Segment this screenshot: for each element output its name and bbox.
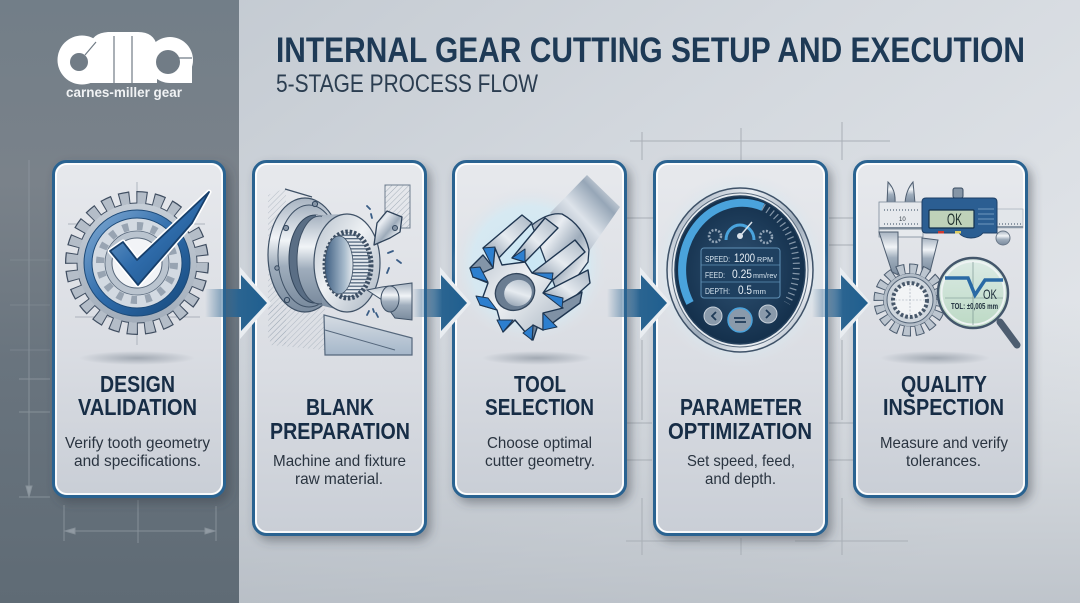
caliper	[879, 182, 1023, 275]
magnifier	[938, 258, 1017, 345]
small dial	[709, 222, 772, 243]
parameter readout: SPEED:	[705, 254, 730, 264]
panel: blank preparation	[254, 162, 426, 534]
magnifier: OK	[983, 286, 997, 302]
description: design validation: and specifications.	[74, 453, 201, 470]
arrow: stage 3 to 4	[607, 267, 671, 339]
icon: caliper and magnifier	[879, 182, 1023, 365]
parameter readout	[701, 248, 780, 298]
heading: design validation: VALIDATION	[78, 394, 197, 420]
icon: cutting tool	[374, 185, 410, 245]
cutter face	[473, 248, 563, 340]
arrow: stage 2 to 3	[412, 267, 471, 339]
left dark band	[0, 0, 239, 603]
heading: blank preparation: BLANK	[306, 394, 374, 420]
parameter readout: 0.5	[738, 283, 752, 297]
heading: quality inspection	[883, 371, 1004, 420]
icon: gear blank on lathe	[268, 185, 412, 355]
heading: tool selection	[485, 371, 594, 420]
caliper: OK	[947, 210, 962, 229]
icon: gear shaper cutter	[452, 175, 620, 365]
description: parameter optimization: and depth.	[705, 471, 776, 488]
heading: quality inspection: INSPECTION	[883, 394, 1004, 420]
heading: tool selection: SELECTION	[485, 394, 594, 420]
description: parameter optimization: Set speed, feed,	[687, 453, 795, 470]
parameter readout: 1200	[734, 251, 755, 265]
parameter readout: FEED:	[705, 270, 725, 280]
parameter readout: 0.25	[732, 267, 752, 281]
caliper: 10	[899, 217, 906, 223]
description: design validation: Verify tooth geometry	[65, 435, 210, 452]
arrow: stage 1 to 2	[205, 267, 271, 339]
logo: carnes-miller gear	[58, 32, 193, 100]
description: blank preparation: raw material.	[295, 471, 383, 488]
icon: boring tool	[367, 283, 412, 320]
heading: parameter optimization	[668, 394, 812, 444]
logo: carnes-miller gear: carnes-miller gear	[66, 84, 183, 100]
heading: blank preparation	[270, 394, 410, 444]
inspected gear	[879, 269, 941, 331]
description: quality inspection: Measure and verify	[880, 435, 1008, 452]
description: parameter optimization	[687, 453, 795, 488]
icon: gear with check mark	[68, 182, 209, 365]
heading: blank preparation: PREPARATION	[270, 418, 410, 444]
subtitle: 5-STAGE PROCESS FLOW	[276, 70, 538, 98]
description: quality inspection: tolerances.	[906, 453, 981, 470]
heading: design validation	[78, 371, 197, 420]
heading: parameter optimization: PARAMETER	[680, 394, 802, 420]
icon: control gauge	[652, 172, 828, 368]
gauge buttons	[704, 305, 777, 332]
description: blank preparation	[273, 453, 406, 488]
parameter readout: mm/rev	[753, 271, 777, 280]
arrow: stage 4 to 5	[812, 267, 871, 339]
machine base	[324, 315, 412, 355]
panel: tool selection	[452, 162, 626, 496]
description: tool selection: cutter geometry.	[485, 453, 595, 470]
description: tool selection	[485, 435, 595, 470]
description: quality inspection	[880, 435, 1008, 470]
parameter readout: DEPTH:	[705, 286, 730, 296]
heading: quality inspection: QUALITY	[901, 371, 987, 397]
description: blank preparation: Machine and fixture	[273, 453, 406, 470]
panel: quality inspection	[854, 162, 1026, 496]
icon: check mark	[110, 192, 209, 285]
heading: tool selection: TOOL	[514, 371, 566, 397]
description: tool selection: Choose optimal	[487, 435, 592, 452]
panel: parameter optimization	[652, 162, 828, 534]
parameter readout: RPM	[757, 255, 773, 264]
heading: design validation: DESIGN	[100, 371, 175, 397]
heading: parameter optimization: OPTIMIZATION	[668, 418, 812, 444]
description: design validation	[65, 435, 210, 470]
magnifier: TOL: ±0,005 mm	[951, 302, 998, 311]
parameter readout: mm	[753, 287, 766, 296]
panel: design validation	[54, 162, 224, 496]
